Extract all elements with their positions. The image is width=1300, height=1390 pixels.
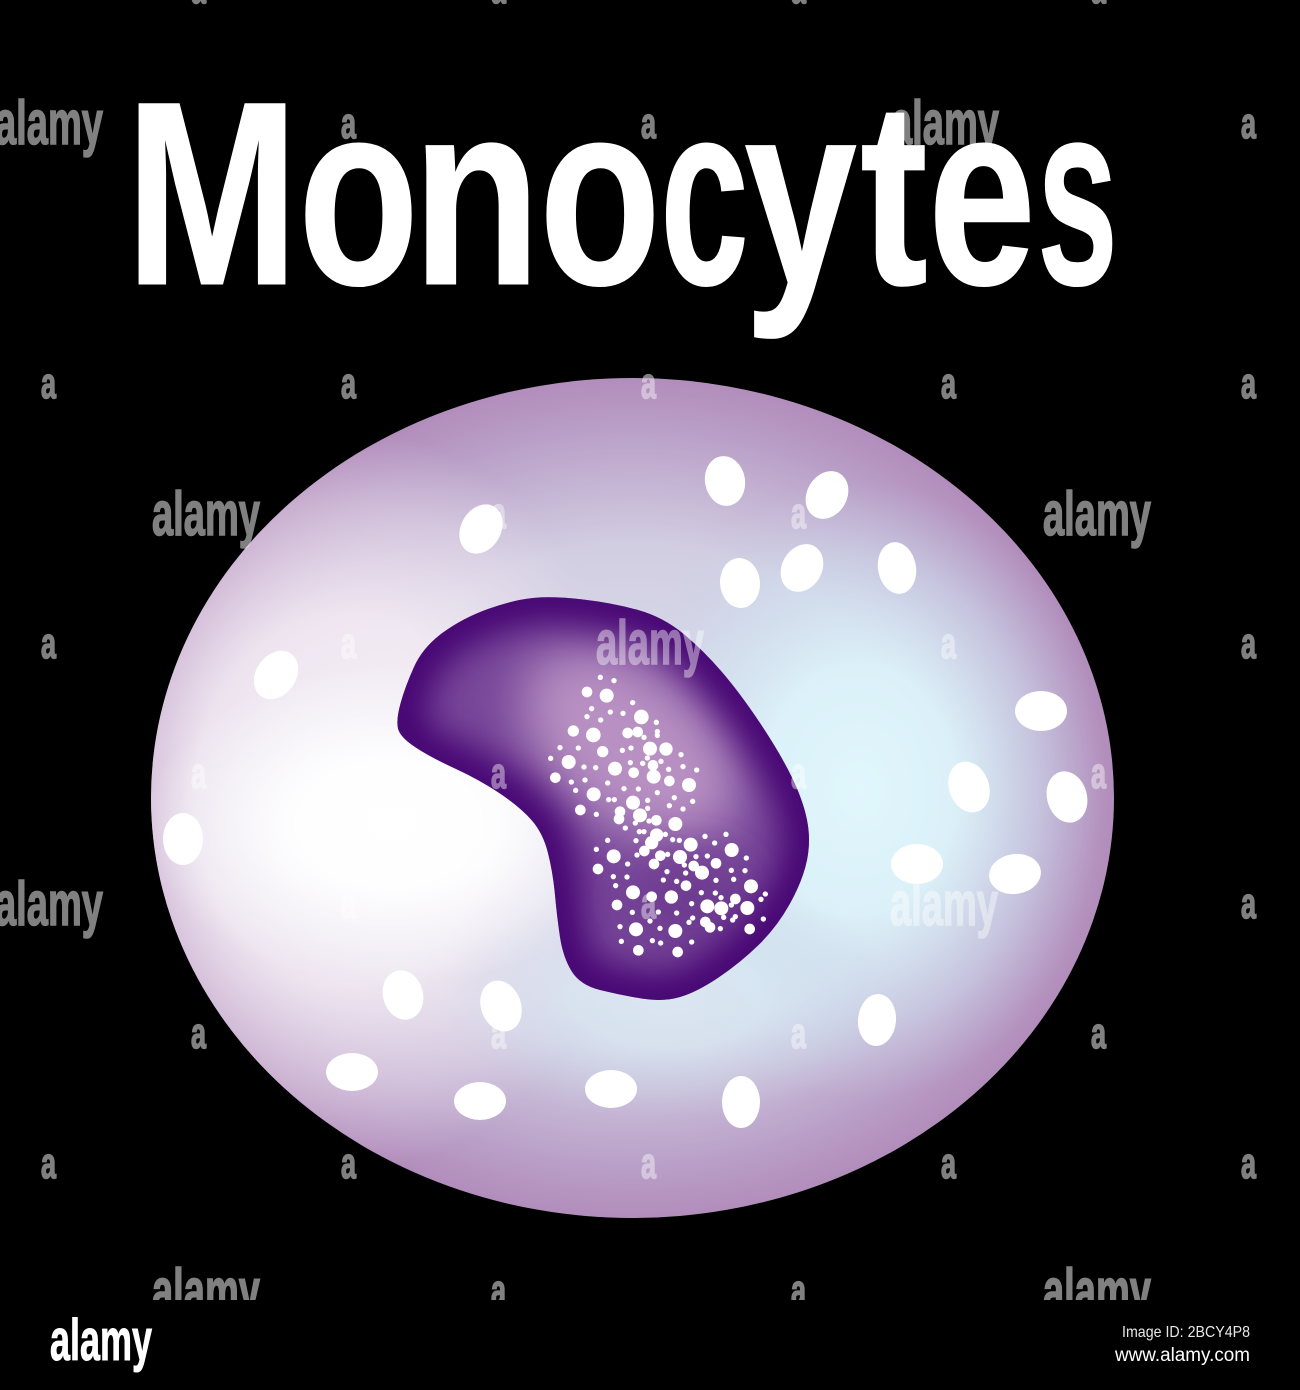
watermarks over cell: a: [791, 489, 806, 538]
clipped bottom watermark row: alamy: [152, 1257, 260, 1326]
watermarks: a: [1241, 1139, 1256, 1188]
watermarks over cell: a: [1091, 749, 1106, 798]
watermarks: a: [41, 359, 56, 408]
title: o: [298, 47, 419, 340]
alamy logo: alamy: [50, 1308, 152, 1373]
watermarks over cell: a: [641, 359, 656, 408]
monocyte cell: [45, 378, 1114, 1218]
nucleus speckles: [548, 675, 768, 957]
watermarks: alamy: [0, 89, 103, 158]
watermarks: a: [1241, 619, 1256, 668]
title: e: [928, 47, 1036, 340]
watermarks over cell: a: [341, 879, 356, 928]
watermarks over cell: alamy: [596, 609, 704, 678]
title: o: [539, 47, 661, 340]
website: www.alamy.com: [1114, 1345, 1250, 1366]
watermarks over cell: a: [341, 619, 356, 668]
watermarks: a: [41, 1139, 56, 1188]
watermarks: alamy: [1043, 480, 1151, 549]
watermarks: a: [341, 359, 356, 408]
watermarks over cell: a: [941, 1139, 956, 1188]
watermarks: a: [1241, 99, 1256, 148]
clipped bottom watermark row: a: [491, 1266, 506, 1315]
watermarks over cell: [192, 378, 1107, 1180]
watermarks: a: [341, 1139, 356, 1188]
cytoplasm: [45, 378, 1114, 1218]
watermarks over cell: alamy: [890, 870, 998, 939]
title: y: [744, 47, 858, 341]
watermarks over cell: a: [491, 1009, 506, 1058]
watermarks: alamy: [152, 480, 260, 549]
white granules: [163, 453, 1093, 1128]
watermarks: a: [941, 359, 956, 408]
watermarks over cell: a: [641, 1139, 656, 1188]
watermarks over cell: alamy: [1043, 480, 1151, 549]
watermarks over cell: a: [941, 619, 956, 668]
watermarks over cell: a: [191, 749, 206, 798]
watermarks over cell: a: [491, 489, 506, 538]
watermarks over cell: a: [491, 749, 506, 798]
watermarks over cell: a: [341, 1139, 356, 1188]
watermarks over cell: alamy: [152, 480, 260, 549]
title: s: [1037, 47, 1118, 340]
watermarks: a: [641, 1139, 656, 1188]
watermarks over cell: a: [641, 879, 656, 928]
nucleus: [397, 597, 809, 1000]
watermarks: alamy: [891, 89, 999, 158]
watermarks: a: [641, 359, 656, 408]
title: M: [125, 47, 299, 340]
title: t: [860, 47, 928, 340]
watermarks: a: [341, 99, 356, 148]
title: c: [660, 47, 749, 340]
watermarks: alamy: [0, 870, 103, 939]
watermarks: a: [641, 99, 656, 148]
watermarks: a: [41, 619, 56, 668]
image id: Image ID: 2BCY4P8: [1122, 1324, 1250, 1341]
watermarks: a: [191, 1009, 206, 1058]
title: n: [412, 47, 541, 340]
watermarks over cell: a: [791, 749, 806, 798]
clipped bottom watermark row: [152, 1257, 1152, 1326]
watermarks over cell: a: [791, 1009, 806, 1058]
watermarks: a: [1091, 1009, 1106, 1058]
clipped bottom watermark row: a: [791, 1266, 806, 1315]
watermarks: a: [1241, 359, 1256, 408]
watermarks: a: [941, 1139, 956, 1188]
watermarks: a: [1241, 879, 1256, 928]
